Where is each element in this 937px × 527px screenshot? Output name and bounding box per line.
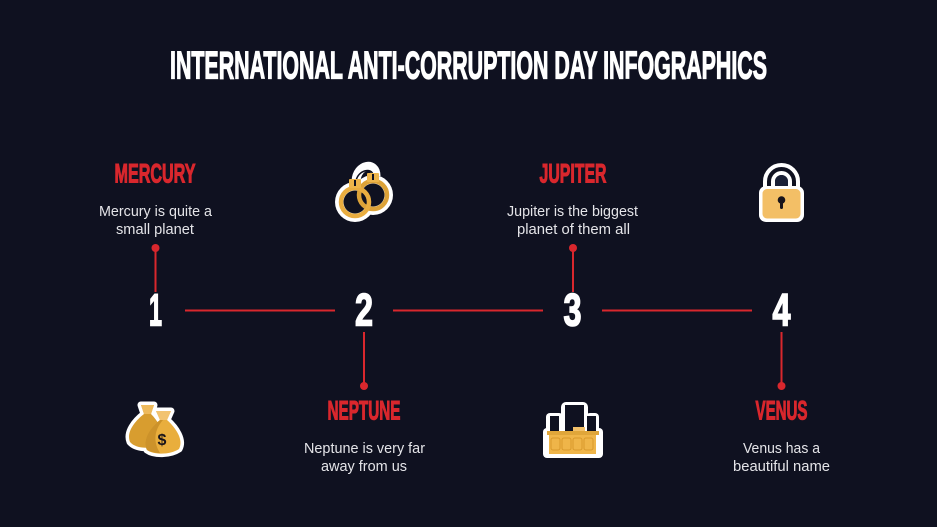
step 2: Neptune: NEPTUNE [328,396,400,426]
step 2: Neptune: 2 [355,284,373,336]
timeline connectors [185,310,752,312]
icon: handcuffs [335,166,393,222]
step 4: Venus: Venus has a [743,441,821,457]
step 1: Mercury: 1 [149,284,162,336]
step 1: Mercury [99,158,213,336]
icon: money bags [129,405,181,454]
step 2: Neptune [304,284,425,475]
step 1: Mercury: MERCURY [114,158,196,188]
icon: padlock [759,169,804,222]
icon: courtroom bench [543,402,603,458]
step 2: Neptune: away from us [321,459,407,475]
step 3: Jupiter: JUPITER [540,158,606,188]
step 3: Jupiter: 3 [564,284,582,336]
step 4: Venus: 4 [772,284,790,336]
step 1: Mercury: small planet [116,222,194,238]
step 4: Venus [733,284,830,475]
step 4: Venus: VENUS [756,396,808,426]
step 1: Mercury: Mercury is quite a [99,204,213,220]
step 3: Jupiter: planet of them all [517,222,630,238]
icon: money bags: $ [158,432,166,449]
step 3: Jupiter [507,158,638,336]
step 2: Neptune: Neptune is very far [304,441,425,457]
step 3: Jupiter: Jupiter is the biggest [507,204,638,220]
step 4: Venus: beautiful name [733,459,830,475]
